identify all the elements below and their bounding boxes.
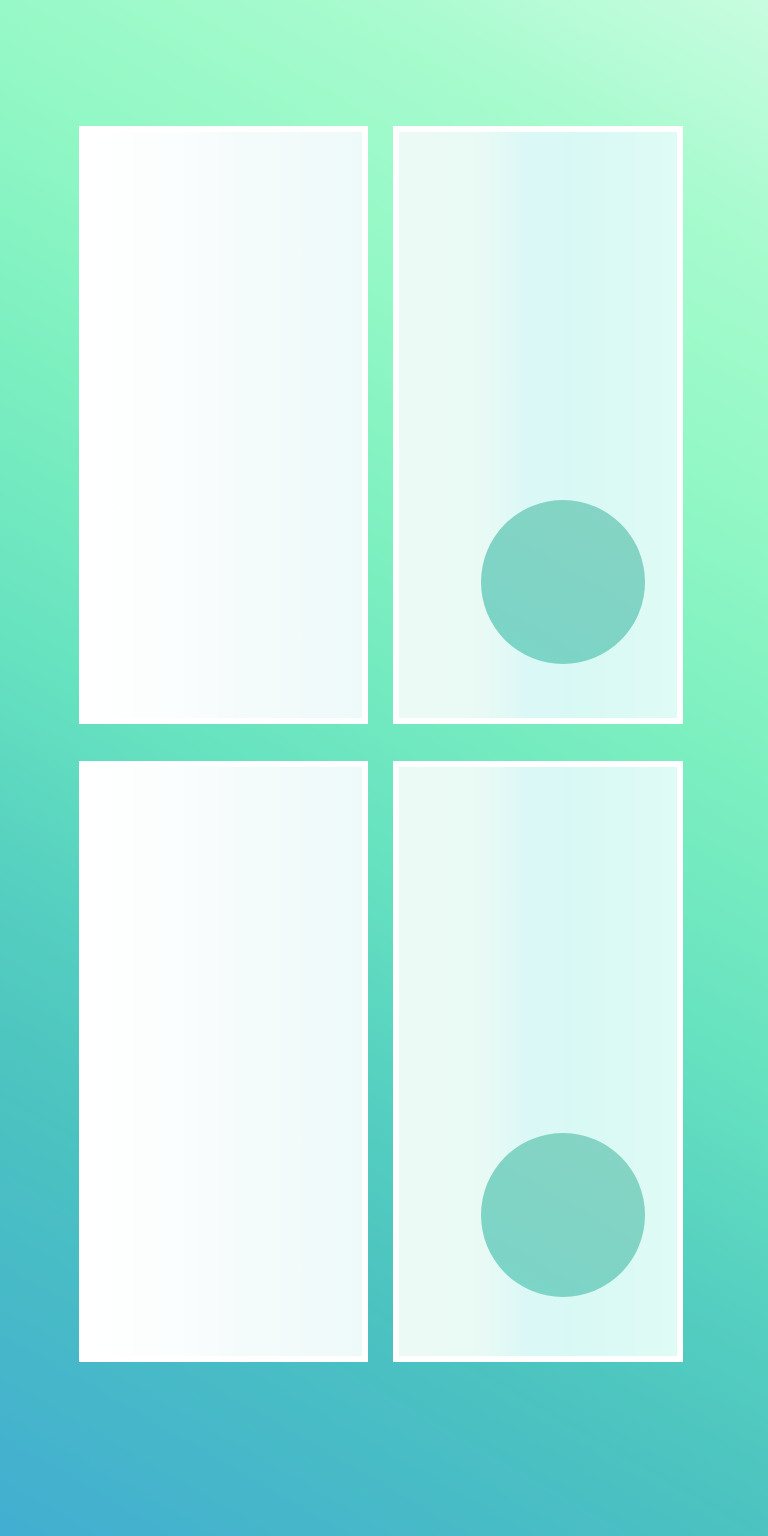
circle: bottom right bbox=[481, 1133, 645, 1297]
circle: top right bbox=[481, 500, 645, 664]
panel: bottom left bbox=[79, 761, 368, 1362]
panel: top right bbox=[393, 126, 683, 724]
panel: top left bbox=[79, 126, 368, 724]
panel: bottom right bbox=[393, 761, 683, 1362]
